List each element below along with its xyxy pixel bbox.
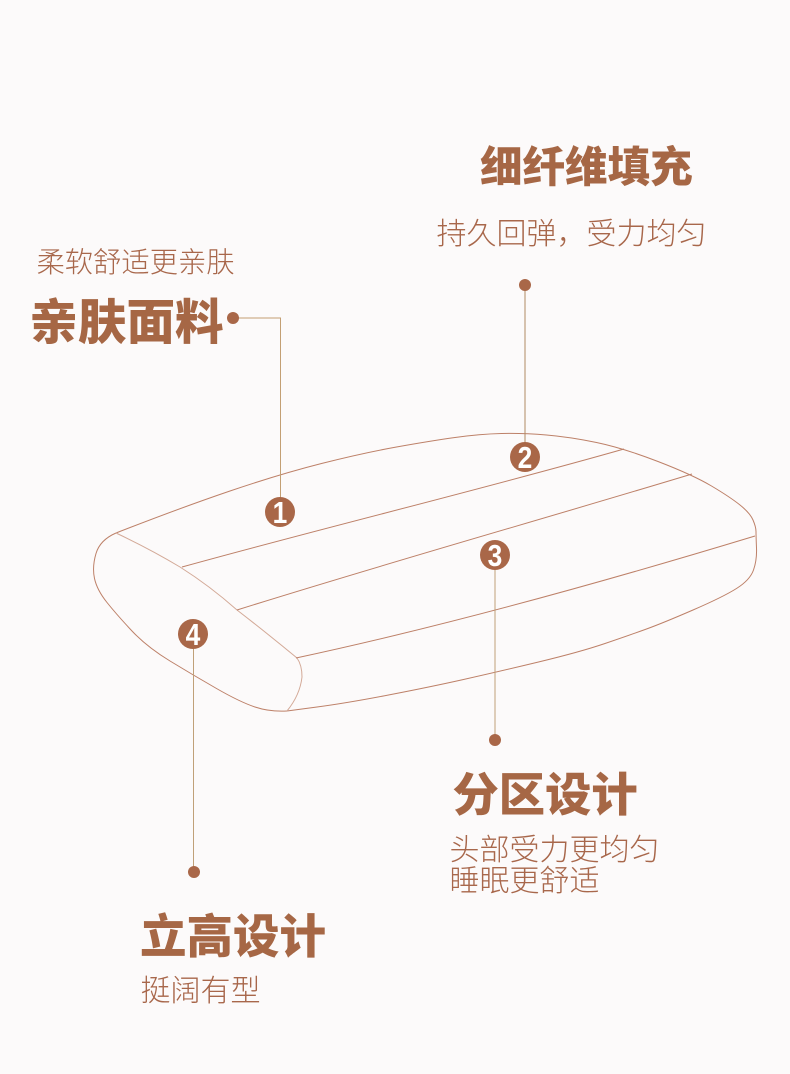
leader line 1 [233,318,280,512]
heading: zoned design: 分区设计 [452,769,638,821]
dot 4 [188,866,200,878]
number badge 2 [510,441,540,476]
text: zoned design description [450,834,660,898]
text: zoned design description: 头部受力更均匀 [450,834,660,867]
dot 3 [489,734,501,746]
text: raised design description: 挺阔有型 [140,975,260,1008]
number badge 3: 3 [488,539,502,574]
leader line 3 [494,555,496,740]
leader line 4 [192,634,194,872]
number badge 2: 2 [518,441,532,476]
heading: fine fibre filling: 细纤维填充 [480,145,693,192]
number badge 1 [265,496,295,531]
dot 2 [519,279,531,291]
text: fine fibre filling description: 持久回弹，受力均匀 [436,218,706,251]
dot 1 [227,312,239,324]
number badge 1: 1 [273,496,287,531]
number badge 4: 4 [186,618,200,653]
text: zoned design description: 睡眠更舒适 [450,865,600,898]
number badge 3 [480,539,510,574]
number badge 4 [178,618,208,653]
heading: raised design: 立高设计 [140,911,326,963]
pillow outline [94,433,757,711]
heading: skin-friendly fabric: 亲肤面料 [30,296,224,350]
text: skin-friendly fabric description: 柔软舒适更亲肤 [36,246,235,278]
leader line 2 [524,285,526,457]
